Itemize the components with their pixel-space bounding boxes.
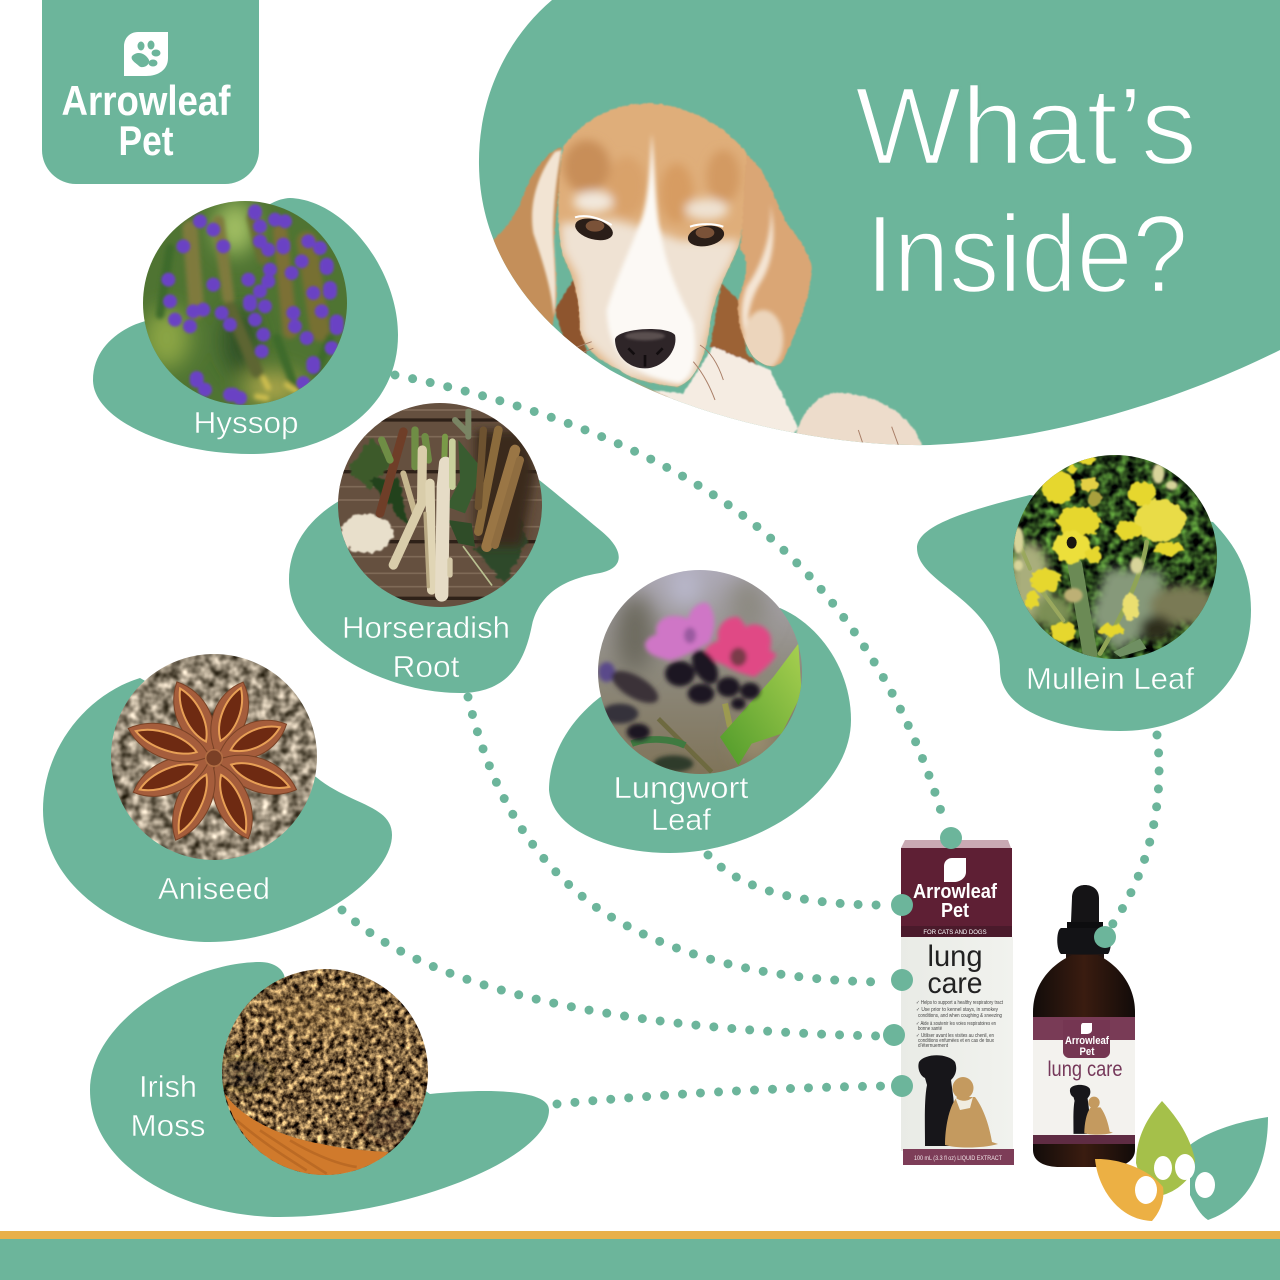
photo: hyssop flowers [140,198,350,408]
photo: mullein flowers [1010,452,1220,662]
box bullet list: ✓ Helps to support a healthy respiratory tract [916,1000,1004,1006]
hyssop purple blossoms [168,211,337,398]
arrow: dotted line from Hyssop to box [395,375,945,825]
label: Leaf [651,802,711,837]
right ear shading [742,203,783,370]
box product name [928,940,982,1000]
panel: hero blob with dog and title [479,0,1280,450]
bottle dropper [1057,885,1111,962]
box dog and cat [918,1055,998,1148]
bottle label [1033,1017,1135,1144]
arrow: dotted line from Horseradish Root to box [468,697,880,982]
panel: Mullein Leaf [917,452,1251,731]
photo: lungwort flowers [595,567,805,777]
bottle glass [1033,955,1135,1167]
arrow: dotted line from Mullein Leaf to bottle [1112,735,1159,925]
box bullet list: bonne santé [918,1026,942,1032]
panel: Aniseed [43,652,392,942]
star anise pods [128,681,297,841]
box bullet list: d’éternuement [918,1043,949,1049]
label: Hyssop [194,405,298,440]
panel: Horseradish Root [289,400,619,693]
photo: star anise on seeds [108,652,320,864]
panel: Irish Moss [90,962,549,1217]
arrow: dotted line from Aniseed to box [342,910,880,1036]
head shading [560,133,740,387]
box product name: care [928,967,982,1000]
panel: Lungwort Leaf [549,567,851,853]
box product name: lung [928,940,982,973]
logo badge [42,0,259,184]
label: Root [392,649,460,684]
box brand text: Arrowleaf [913,881,997,903]
box brand text: FOR CATS AND DOGS [923,930,987,936]
label [342,610,510,684]
brand mark: three leaves with paw [1095,1101,1268,1221]
dog eyes [574,215,724,246]
box leaf icon [944,858,966,882]
label: Moss [130,1108,206,1143]
arrow: dotted line from Irish Moss to box [557,1086,890,1104]
left ear highlight [532,150,562,317]
dog whiskers and paw toes [573,342,898,445]
logo wordmark: Pet [118,117,174,164]
bottle product name: lung care [1048,1058,1122,1081]
icon: leaf with paw [124,32,168,76]
title [855,65,1197,316]
logo wordmark: Arrowleaf [62,77,231,124]
box volume text: 100 mL (3.3 fl oz) LIQUID EXTRACT [914,1155,1002,1162]
bottle brand text [1065,1023,1109,1058]
connector end dots [883,827,1116,1097]
bottle brand text: Pet [1080,1046,1095,1058]
logo wordmark [62,77,231,164]
product: lung care box [901,840,1014,1165]
label: Aniseed [158,871,270,906]
title: What’s [855,65,1197,188]
label: Mullein Leaf [1026,661,1194,696]
label: Irish [139,1069,197,1104]
arrow: dotted line from Lungwort Leaf to box [708,855,885,905]
box bullet list: ✓ Aide à soutenir les voies respiratoires en [916,1021,996,1027]
box bullet list: conditions, and when coughing & sneezing [918,1013,1002,1019]
label [130,1069,206,1143]
box bullet list: ✓ Utiliser avant les visites au chenil, en [916,1033,994,1039]
illustration: beagle dog [492,103,923,450]
box bullet list [916,1000,1004,1049]
panel: Hyssop [93,198,398,454]
box bullet list: ✓ Use prior to kennel stays, in smokey [916,1007,998,1013]
bottle brand text: Arrowleaf [1065,1035,1109,1047]
photo: horseradish roots [335,400,545,610]
box brand text [913,881,997,936]
box bullet list: conditions enfumées et en cas de toux [918,1038,994,1044]
photo: irish moss in wooden bowl [213,967,432,1179]
bottle dog and cat [1070,1085,1113,1135]
white grated root [340,514,393,553]
label: Lungwort [614,770,749,805]
box brand text: Pet [941,900,969,922]
product: lung care dropper bottle [1033,885,1135,1167]
dog nose [615,329,675,368]
label: Horseradish [342,610,510,645]
label [614,770,749,837]
title: Inside? [866,193,1188,316]
footer bands [0,1231,1280,1280]
